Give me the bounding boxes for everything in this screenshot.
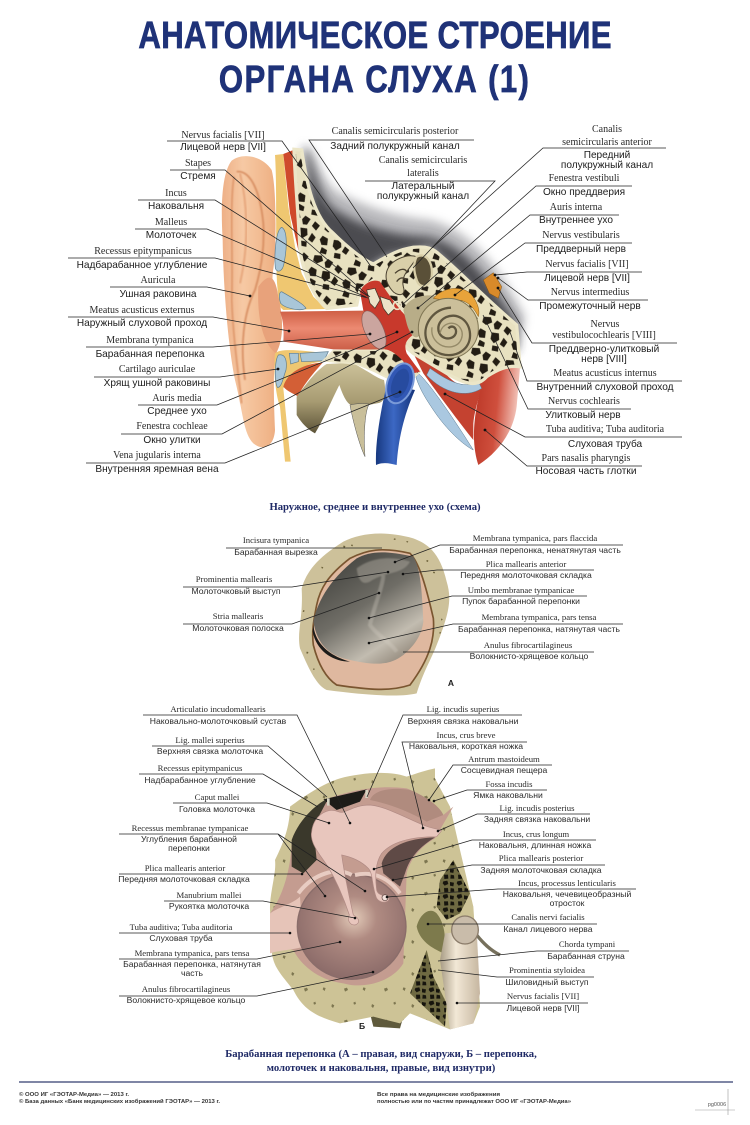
label: Canalis nervi facialis: Канал лицевого нерва (503, 924, 593, 934)
label: Fenestra cochleae: Окно улитки (143, 435, 201, 446)
footer copyright (19, 1091, 221, 1105)
label: Lig. mallei superius: Верхняя связка молоточка (157, 746, 263, 756)
label: Fossa incudis (433, 779, 547, 802)
label: Prominentia mallearis (183, 571, 389, 596)
label: Nervus cochlearis (483, 315, 631, 421)
label: Fenestra cochleae: Fenestra cochleae (136, 421, 208, 432)
label: Chorda tympani (438, 939, 629, 961)
label: Fossa incudis: Ямка наковальни (473, 790, 543, 800)
label: Plica mallearis anterior A: Plica mallearis anterior (486, 559, 566, 569)
label: Auricula: Ушная раковина (119, 289, 197, 300)
label: Canalis semicircularis lateralis: полукружный канал (377, 191, 469, 202)
label: Caput mallei (173, 792, 330, 824)
label: Stria mallearis: Молоточковая полоска (192, 623, 284, 633)
label: Incisura tympanica: Барабанная вырезка (234, 547, 318, 557)
label: Canalis semicircularis lateralis: Латеральный (392, 181, 454, 192)
label: Recessus membranae tympanicae: перепонки (168, 843, 210, 853)
label: Articulatio incudomallearis (143, 704, 351, 824)
label: Articulatio incudomallearis: Наковально-молоточковый сустав (150, 716, 287, 726)
label: Lig. incudis superius: Lig. incudis superius (427, 704, 500, 714)
label: Nervus facialis right: Лицевой нерв [VII] (544, 273, 630, 284)
label: Nervus intermedius (497, 277, 648, 312)
label: Tuba auditiva: Tuba auditiva; Tuba auditoria (546, 424, 665, 435)
footer rights (377, 1091, 571, 1105)
middle ear cavity (360, 281, 420, 373)
label: Nervus facialis Б: Лицевой нерв [VII] (506, 1003, 580, 1013)
caption: tympanic membrane: молоточек и наковальня, правые, вид изнутри) (267, 1063, 496, 1074)
label: Fenestra vestibuli: Fenestra vestibuli (549, 173, 620, 184)
malleus and incus (311, 805, 442, 925)
label: Nervus facialis Б (456, 991, 588, 1013)
label: Chorda tympani: Chorda tympani (559, 939, 616, 949)
label: Meatus acusticus externus (68, 305, 290, 332)
blue lining of tube (416, 373, 473, 450)
label: Incus, processus lenticularis: Наковальня, чечевицеобразный (503, 889, 631, 899)
label: Nervus facialis right (494, 259, 642, 284)
label: Prominentia styloidea (438, 965, 594, 987)
cochlea (418, 298, 478, 358)
label: Incus (138, 188, 368, 296)
label: Membrana tympanica, pars tensa A (368, 612, 623, 644)
label: Incus, crus longum (373, 829, 596, 870)
label: Recessus epitympanicus Б: Надбарабанное углубление (144, 775, 256, 785)
label: Incus, crus breve: Incus, crus breve (436, 730, 496, 740)
label: Plica mallearis anterior Б (118, 863, 303, 884)
label: Antrum mastoideum: Antrum mastoideum (468, 754, 540, 764)
label: Nervus facialis right: Nervus facialis [VII] (545, 259, 629, 270)
dark epitympanic space (323, 789, 367, 810)
label: Membrana tympanica, pars tensa A: Барабанная перепонка, натянутая часть (458, 624, 621, 634)
red muscle strip (283, 150, 303, 250)
label: Fenestra vestibuli (402, 173, 632, 305)
label: Pars nasalis pharyngis: Pars nasalis pharyngis (542, 453, 631, 464)
label: Anulus fibrocartilagineus Б: Волокнисто-хрящевое кольцо (127, 995, 246, 1005)
auricle (222, 156, 282, 447)
footer rights: полностью или по частям принадлежат ООО ИГ «ГЭОТАР-Медиа» (377, 1099, 571, 1105)
tympanic cavity (270, 787, 453, 985)
label: Vena jugularis interna: Vena jugularis interna (113, 450, 201, 461)
chorda branch (477, 935, 500, 955)
label: Manubrium mallei: Manubrium mallei (177, 890, 242, 900)
label: Lig. mallei superius: Lig. mallei superius (175, 735, 245, 745)
nerve bundle (483, 273, 502, 298)
label: Recessus epitympanicus: Recessus epitympanicus (94, 246, 192, 257)
blue cartilage islands (275, 227, 306, 310)
footer rule (19, 1081, 733, 1083)
label: Meatus acusticus externus: Наружный слуховой проход (77, 318, 207, 329)
spongy wedge upper (437, 860, 470, 920)
label: Canalis semicircularis lateralis: lateralis (407, 168, 439, 179)
label: Auris interna: Auris interna (550, 202, 603, 213)
label: Nervus cochlearis: Улитковый нерв (545, 410, 621, 421)
illustration Б: tympanic membrane, malleus and incus inner view (270, 768, 500, 1029)
label: Stria mallearis: Stria mallearis (213, 611, 264, 621)
label: Fenestra cochleae (121, 331, 413, 446)
label: Plica mallearis posterior (392, 853, 605, 881)
label: Canalis semicircularis anterior: semicircularis anterior (562, 137, 653, 148)
label: Prominentia styloidea: Шиловидный выступ (505, 977, 589, 987)
label: Prominentia styloidea: Prominentia styloidea (509, 965, 585, 975)
label: Meatus acusticus internus: Внутренний слуховой проход (536, 382, 674, 393)
label: Membrana tympanica: Membrana tympanica (106, 335, 194, 346)
ossicles (367, 288, 401, 315)
title: ОРГАНА СЛУХА (1) (219, 59, 529, 101)
anterior fold highlight (357, 558, 410, 583)
facial canal (417, 911, 445, 953)
label: Membrana tympanica (86, 333, 371, 360)
label: Recessus epitympanicus (68, 246, 368, 298)
label: Chorda tympani: Барабанная струна (547, 951, 625, 961)
label: Recessus epitympanicus Б: Recessus epitympanicus (158, 763, 243, 773)
illustration: outer, middle and inner ear (222, 145, 525, 465)
cranial shadow soft (303, 145, 525, 353)
label: Canalis semicircularis anterior (432, 124, 666, 248)
label: Manubrium mallei (164, 890, 356, 919)
label: Stapes (170, 158, 370, 297)
label: Canalis nervi facialis (427, 912, 597, 934)
caption: ear scheme: Наружное, среднее и внутреннее ухо (схема) (269, 502, 481, 513)
label: Anulus fibrocartilagineus A: Волокнисто-хрящевое кольцо (470, 651, 589, 661)
label: Membrana tympanica, pars tensa Б: часть (181, 968, 204, 978)
label: Canalis semicircularis posterior: Canalis semicircularis posterior (332, 126, 459, 137)
label: Canalis semicircularis posterior: Задний полукружный канал (330, 141, 460, 152)
label: Meatus acusticus internus: Meatus acusticus internus (553, 368, 657, 379)
label: Incus, processus lenticularis: Incus, processus lenticularis (518, 878, 616, 888)
label: Canalis nervi facialis: Canalis nervi facialis (511, 912, 585, 922)
marker A: А (448, 678, 454, 688)
dark incus pocket (382, 837, 435, 887)
label: Plica mallearis anterior Б: Передняя молоточковая складка (118, 874, 250, 884)
superior ligaments (328, 790, 367, 806)
lower blue cartilage (275, 352, 328, 387)
label: Plica mallearis anterior A (402, 559, 594, 580)
label: Incus: Incus (165, 188, 187, 199)
pale stria (370, 575, 397, 652)
label: Antrum mastoideum (428, 754, 552, 801)
label: Membrana tympanica, pars flaccida: Membrana tympanica, pars flaccida (473, 533, 597, 543)
label: Recessus membranae tympanicae: Recessus membranae tympanicae (132, 823, 249, 833)
spongy temporal bone (294, 149, 520, 383)
label: Canalis semicircularis anterior: полукружный канал (561, 160, 653, 171)
label: Auris media: Auris media (152, 393, 202, 404)
spongy wedge lower (410, 950, 447, 1027)
label: Recessus epitympanicus: Надбарабанное углубление (77, 259, 208, 271)
label: Plica mallearis anterior A: Передняя молоточковая складка (460, 570, 592, 580)
label: Nervus facialis Б: Nervus facialis [VII] (507, 991, 579, 1001)
label: Nervus intermedius: Nervus intermedius (551, 287, 629, 298)
label: Malleus: Молоточек (146, 230, 197, 241)
label: Lig. incudis posterius: Задняя связка наковальни (484, 814, 590, 824)
shadow under bone (370, 1013, 403, 1028)
label: Umbo: Пупок барабанной перепонки (462, 596, 580, 606)
blue band above tube (427, 368, 482, 393)
label: Prominentia mallearis: Prominentia mallearis (196, 574, 273, 584)
label: Auris interna: Внутреннее ухо (539, 215, 613, 226)
pharynx (474, 367, 520, 465)
label: Nervus vestibulocochlearis: Преддверно-улитковый (549, 344, 659, 355)
label: Stapes: Stapes (185, 158, 211, 169)
eardrum (313, 552, 423, 664)
facial nerve (440, 930, 480, 1029)
tympanic membrane (297, 874, 406, 979)
label: Auris media: Среднее ухо (147, 406, 207, 417)
label: Auris media (138, 331, 398, 417)
label: Malleus: Malleus (155, 217, 187, 228)
label: Anulus fibrocartilagineus A: Anulus fibrocartilagineus (484, 640, 573, 650)
label: Meatus acusticus externus: Meatus acusticus externus (90, 305, 195, 316)
label: Cartilago auriculae (94, 364, 279, 389)
print code and crop mark (695, 1089, 735, 1115)
orange nerve (433, 288, 479, 317)
label: Caput mallei: Caput mallei (195, 792, 240, 802)
label: Manubrium mallei: Рукоятка молоточка (169, 901, 249, 911)
label: Membrana tympanica, pars flaccida: Барабанная перепонка, ненатянутая часть (449, 545, 621, 555)
label: Canalis semicircularis anterior: Canalis (592, 124, 622, 135)
label: Auris interna (417, 202, 619, 309)
bone ring (299, 534, 449, 696)
label: Vena jugularis interna (86, 391, 401, 475)
label: Incus, processus lenticularis (386, 878, 636, 908)
label: Articulatio incudomallearis: Articulatio incudomallearis (170, 704, 266, 714)
cranial shadow core (303, 148, 517, 353)
tympanic membrane (357, 307, 391, 353)
label: Plica mallearis posterior: Задняя молоточковая складка (480, 865, 602, 875)
styloid process (350, 404, 369, 457)
label: Incisura tympanica (226, 535, 382, 557)
tube wall (270, 897, 303, 953)
label: Auricula: Auricula (140, 275, 176, 286)
label: Incus, crus breve: Наковальня, короткая ножка (409, 741, 523, 751)
label: Pars nasalis pharyngis: Носовая часть глотки (536, 466, 636, 477)
label: Tuba auditiva Б (119, 922, 291, 943)
label: Vena jugularis interna: Внутренняя яремная вена (95, 464, 219, 475)
footer copyright: © ООО ИГ «ГЭОТАР-Медиа» — 2013 г. (19, 1091, 130, 1098)
bone pores (303, 538, 443, 670)
caption: tympanic membrane: Барабанная перепонка (А – правая, вид снаружи, Б – перепонка, (225, 1049, 537, 1060)
dark recess (292, 798, 328, 873)
label: Incus, crus longum: Наковальня, длинная ножка (479, 840, 592, 850)
footer copyright: © База данных «Банк медицинских изображений ГЭОТАР» — 2013 г. (19, 1098, 221, 1105)
label: Membrana tympanica, pars tensa A: Membrana tympanica, pars tensa (482, 612, 597, 622)
label: Antrum mastoideum: Сосцевидная пещера (461, 765, 548, 775)
external auditory canal (280, 311, 387, 350)
label: Meatus acusticus internus (510, 332, 682, 393)
label: Tuba auditiva: Слуховая труба (568, 438, 643, 450)
title (138, 15, 612, 101)
yellow cartilage upper (275, 154, 326, 310)
folds (298, 871, 400, 893)
label: Recessus membranae tympanicae: Углубления барабанной (141, 834, 237, 844)
label: Tuba auditiva (444, 393, 682, 450)
footer rights: Все права на медицинские изображения (377, 1091, 500, 1098)
label: Nervus vestibulocochlearis: нерв [VIII] (581, 354, 627, 365)
label: Membrana tympanica, pars flaccida (394, 533, 623, 563)
label: Canalis semicircularis posterior (309, 126, 474, 257)
label: Auricula (110, 275, 251, 300)
print code and crop mark: pg0006 (708, 1102, 726, 1108)
lenticular process (382, 895, 388, 901)
label: Lig. incudis superius (367, 704, 522, 797)
label: Canalis semicircularis lateralis (365, 155, 495, 268)
auditory tube (413, 353, 483, 440)
label: Recessus epitympanicus Б (139, 763, 318, 807)
label: Nervus intermedius: Промежуточный нерв (539, 301, 641, 312)
label: Plica mallearis posterior: Plica mallearis posterior (499, 853, 583, 863)
label: Canalis semicircularis lateralis: Canalis semicircularis (379, 155, 467, 166)
label: Cartilago auriculae: Хрящ ушной раковины (104, 378, 210, 389)
label: Membrana tympanica, pars tensa Б: Membrana tympanica, pars tensa (135, 948, 250, 958)
label: Nervus vestibulocochlearis (497, 287, 677, 365)
label: Tuba auditiva Б: Tuba auditiva; Tuba auditoria (130, 922, 232, 932)
spongy bone under canal (323, 350, 420, 378)
label: Nervus vestibularis (454, 230, 632, 296)
label: Nervus vestibularis: Преддверный нерв (536, 244, 626, 255)
label: Membrana tympanica, pars tensa Б: Барабанная перепонка, натянутая (123, 959, 261, 969)
label: Lig. mallei superius (152, 735, 327, 797)
label: Recessus membranae tympanicae (119, 823, 366, 897)
label: Nervus vestibulocochlearis: Nervus (591, 319, 620, 330)
fibrocartilaginous ring (313, 550, 434, 689)
jugular vein (376, 360, 419, 465)
bone block (270, 768, 480, 1029)
label: Anulus fibrocartilagineus Б (119, 971, 374, 1005)
title: АНАТОМИЧЕСКОЕ СТРОЕНИЕ (138, 15, 612, 57)
label: Membrana tympanica, pars tensa Б (119, 941, 341, 978)
label: Lig. incudis posterius (437, 803, 590, 832)
label: Malleus (135, 217, 366, 297)
temporal bone lower (297, 363, 385, 433)
label: Nervus facialis left: Nervus facialis [VII] (181, 130, 265, 141)
dark shadow crescent (313, 625, 350, 662)
label: Fenestra vestibuli: Окно преддверия (543, 187, 625, 198)
label: Cartilago auriculae: Cartilago auriculae (119, 364, 196, 375)
nerve cut face (452, 916, 478, 944)
label: Incus, crus longum: Incus, crus longum (503, 829, 569, 839)
label: Nervus cochlearis: Nervus cochlearis (548, 396, 620, 407)
label: Incisura tympanica: Incisura tympanica (243, 535, 309, 545)
label: Caput mallei: Головка молоточка (179, 804, 255, 814)
marker Б: Б (359, 1021, 365, 1031)
label: Plica mallearis anterior Б: Plica mallearis anterior (145, 863, 225, 873)
label: Membrana tympanica: Барабанная перепонка (96, 348, 205, 360)
label: Fossa incudis: Fossa incudis (485, 779, 533, 789)
label: Anulus fibrocartilagineus Б: Anulus fibrocartilagineus (142, 984, 231, 994)
label: Incus, processus lenticularis: отросток (550, 898, 585, 908)
label: Stria mallearis (183, 592, 380, 633)
label: Prominentia mallearis: Молоточковый выступ (191, 586, 281, 596)
label: Umbo (368, 585, 587, 619)
label: Lig. incudis posterius: Lig. incudis posterius (499, 803, 575, 813)
vestibule (403, 295, 447, 337)
label: Nervus facialis left (167, 130, 372, 268)
label: Tuba auditiva Б: Слуховая труба (149, 933, 213, 943)
label: Canalis semicircularis anterior: Передний (584, 150, 630, 161)
label: Anulus fibrocartilagineus A (403, 640, 594, 661)
label: Nervus vestibulocochlearis: vestibulocochlearis [VIII] (552, 330, 656, 341)
illustration A: tympanic membrane outer view (299, 534, 449, 696)
label: Lig. incudis superius: Верхняя связка наковальни (408, 716, 519, 726)
label: Stapes: Стремя (180, 171, 216, 182)
label: Incus, crus breve (402, 730, 527, 829)
label: Incus: Наковальня (148, 201, 204, 212)
label: Umbo: Umbo membranae tympanicae (468, 585, 574, 595)
semicircular canals (386, 255, 432, 295)
label: Nervus facialis left: Лицевой нерв [VII] (180, 142, 266, 153)
label: Nervus vestibularis: Nervus vestibularis (542, 230, 620, 241)
lower yellow cartilage (274, 350, 325, 462)
caption: tympanic membrane (225, 1049, 537, 1074)
mastoid antrum (370, 789, 443, 822)
label: Pars nasalis pharyngis (484, 429, 642, 477)
muscle below canal (283, 363, 323, 397)
